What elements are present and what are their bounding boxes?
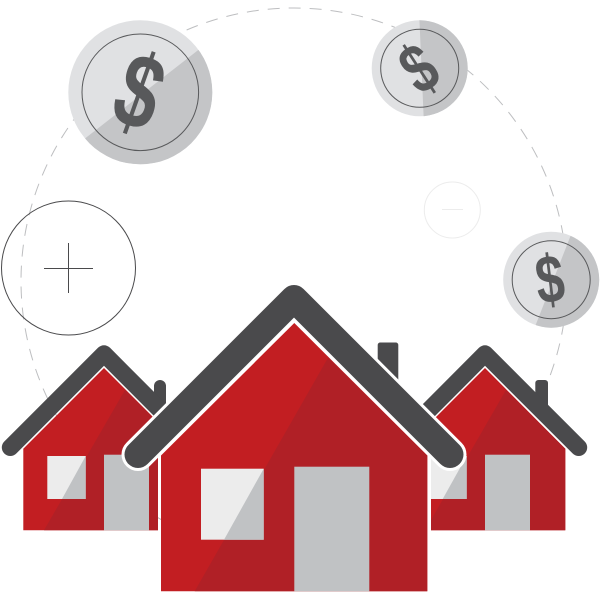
center house wall shade: [195, 357, 427, 591]
left house window: [47, 456, 86, 499]
center house door: [294, 467, 369, 591]
icon: large dollar coin: [68, 20, 212, 164]
right house wall shade: [431, 390, 565, 530]
center house wall: [161, 323, 427, 591]
icon: plus in circle: [2, 201, 136, 335]
center house chimney: [378, 342, 398, 400]
left house wall: [23, 368, 158, 530]
icon: right dollar coin: [503, 232, 600, 328]
center house: [138, 298, 450, 591]
right house: [420, 354, 579, 530]
left house chimney: [154, 380, 166, 410]
icon: top right dollar coin: [372, 20, 468, 116]
icon: top right dollar coin: $: [386, 28, 453, 110]
left house door: [104, 455, 149, 530]
icon: large dollar coin: $: [100, 28, 180, 155]
left house wall shade: [44, 390, 158, 530]
left house roof: [10, 354, 168, 448]
icon: right dollar coin: $: [531, 240, 569, 319]
right house chimney: [535, 380, 548, 410]
center house roof: [138, 298, 450, 454]
right house door: [485, 455, 530, 530]
right house wall: [431, 368, 565, 530]
right house roof: [420, 354, 579, 448]
center house window: [201, 469, 264, 540]
icon: faint minus in circle: [424, 182, 480, 238]
left house: [10, 354, 168, 530]
right house window: [431, 456, 467, 499]
